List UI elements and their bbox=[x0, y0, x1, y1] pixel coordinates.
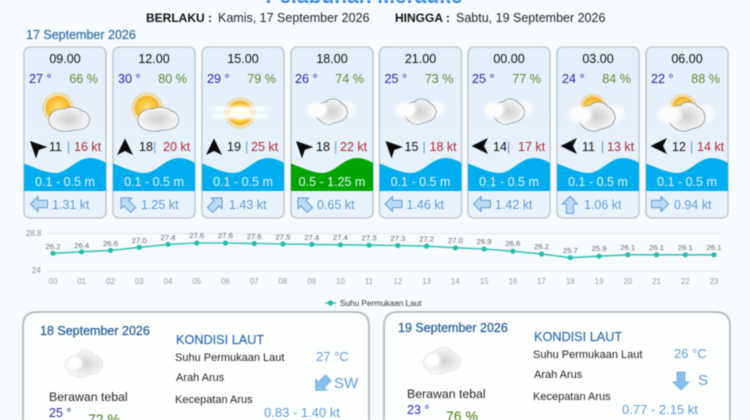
line chart: sea surface temperature: 27.4 bbox=[304, 233, 320, 242]
card: 09.00: 27 ° bbox=[29, 72, 52, 86]
card: 15.00: 79 % bbox=[247, 72, 276, 86]
card: 21.00: 15 bbox=[404, 140, 418, 154]
panel: 18 September forecast: Kecepatan Arus bbox=[175, 394, 253, 406]
card: 15.00 bbox=[202, 47, 284, 218]
card: 06.00: 12 bbox=[672, 140, 686, 154]
panel: 19 September forecast: Arah Arus bbox=[534, 369, 583, 381]
card: 18.00 bbox=[290, 47, 373, 218]
line chart: sea surface temperature: 02 bbox=[106, 277, 115, 286]
card: 12.00: 1.25 kt bbox=[141, 198, 179, 212]
line chart: sea surface temperature: 11 bbox=[365, 277, 373, 286]
line chart: sea surface temperature: 26.4 bbox=[74, 241, 90, 250]
validity header: HINGGA : bbox=[395, 11, 450, 25]
card: 15.00: 29 ° bbox=[207, 72, 230, 86]
card: 09.00: 1.31 kt bbox=[52, 198, 90, 212]
panel: 19 September forecast: KONDISI LAUT bbox=[534, 330, 622, 344]
line chart: sea surface temperature: 13 bbox=[422, 277, 431, 286]
card: 15.00: 19 bbox=[227, 140, 241, 154]
card: 12.00: | bbox=[153, 140, 156, 154]
card: 21.00: 25 ° bbox=[384, 72, 407, 86]
card: 21.00 bbox=[380, 47, 462, 218]
chart legend: Suhu Permukaan Laut bbox=[340, 299, 422, 308]
card: 09.00: 0.1 - 0.5 m bbox=[35, 175, 95, 189]
line chart: sea surface temperature: 25.7 bbox=[563, 246, 578, 255]
line chart: sea surface temperature: 08 bbox=[279, 277, 287, 286]
card: 00.00: 0.1 - 0.5 m bbox=[479, 175, 539, 189]
card: 15.00: 15.00 bbox=[227, 52, 259, 66]
card: 03.00: 03.00 bbox=[582, 52, 614, 66]
card: 06.00: 0.1 - 0.5 m bbox=[657, 175, 717, 189]
card: 12.00 bbox=[113, 47, 195, 218]
line chart: sea surface temperature: 12 bbox=[394, 277, 402, 286]
card: 03.00: 13 kt bbox=[607, 140, 635, 154]
card: 00.00 bbox=[468, 47, 550, 218]
validity header bbox=[146, 11, 605, 25]
line chart: sea surface temperature: 27.0 bbox=[132, 236, 147, 245]
panel: 19 September forecast: Suhu Permukaan Laut bbox=[533, 349, 642, 361]
line chart: sea surface temperature: 17 bbox=[537, 277, 546, 286]
card: 00.00: 1.42 kt bbox=[495, 198, 533, 212]
card: 06.00: | bbox=[690, 140, 693, 154]
card: 03.00: 84 % bbox=[602, 72, 631, 86]
card: 00.00: 14 bbox=[493, 140, 507, 154]
card: 03.00: 0.1 - 0.5 m bbox=[568, 175, 628, 189]
card: 09.00: 09.00 bbox=[49, 52, 81, 66]
line chart: sea surface temperature: 20 bbox=[623, 277, 633, 286]
card: 15.00: 25 kt bbox=[251, 140, 279, 154]
card: 21.00: | bbox=[422, 140, 426, 154]
card: 18.00: 74 % bbox=[335, 72, 364, 86]
line chart: sea surface temperature: 15 bbox=[480, 277, 489, 286]
card: 03.00 bbox=[557, 47, 639, 218]
card: 21.00: 73 % bbox=[425, 72, 454, 86]
line chart: sea surface temperature: 27.4 bbox=[333, 233, 349, 242]
card: 18.00: 0.65 kt bbox=[317, 198, 355, 212]
line chart: sea surface temperature: 27.6 bbox=[247, 232, 262, 241]
card: 00.00: 77 % bbox=[512, 72, 541, 86]
panel: 18 September forecast: KONDISI LAUT bbox=[176, 333, 264, 347]
card: 09.00 bbox=[24, 47, 106, 218]
card: 06.00: 06.00 bbox=[671, 52, 703, 66]
line chart: sea surface temperature: 22 bbox=[681, 277, 690, 286]
line chart: sea surface temperature: 10 bbox=[336, 277, 345, 286]
validity header: BERLAKU : bbox=[146, 11, 212, 25]
card: 18.00: 18 bbox=[316, 140, 330, 154]
card: 21.00: 21.00 bbox=[405, 52, 436, 66]
card: 09.00: 11 bbox=[49, 140, 62, 154]
card: 21.00: 1.46 kt bbox=[406, 198, 445, 212]
line chart: sea surface temperature: 26.1 bbox=[649, 243, 664, 252]
panel: 18 September forecast bbox=[23, 312, 369, 420]
card: 09.00: | bbox=[67, 140, 70, 154]
card: 03.00: 1.06 kt bbox=[584, 198, 622, 212]
card: 06.00 bbox=[646, 47, 728, 218]
line chart: sea surface temperature: 18 bbox=[566, 277, 575, 286]
line chart: sea surface temperature: 16 bbox=[508, 277, 517, 286]
line chart: sea surface temperature: 01 bbox=[77, 277, 86, 286]
panel: 18 September forecast: Suhu Permukaan Laut bbox=[175, 352, 284, 364]
line chart: sea surface temperature: 26.1 bbox=[707, 243, 721, 252]
card: 12.00: 0.1 - 0.5 m bbox=[124, 175, 184, 189]
validity header: Kamis, 17 September 2026 bbox=[218, 11, 370, 25]
line chart: sea surface temperature: 26.1 bbox=[620, 243, 635, 252]
card: 18.00: 18.00 bbox=[316, 52, 348, 66]
card: 03.00: 11 bbox=[582, 140, 595, 154]
line chart: sea surface temperature: 06 bbox=[221, 277, 230, 286]
card: 18.00: 22 kt bbox=[340, 140, 368, 154]
line chart: sea surface temperature: 26.2 bbox=[46, 242, 60, 251]
card: 18.00: | bbox=[334, 140, 337, 154]
panel: 18 September forecast: 18 September 2026 bbox=[40, 324, 150, 338]
line chart: sea surface temperature: 27.6 bbox=[189, 231, 204, 240]
line chart: sea surface temperature: 19 bbox=[595, 277, 603, 286]
panel: 19 September forecast: 26 °C bbox=[674, 346, 707, 361]
line chart: sea surface temperature: 28.8 bbox=[26, 229, 41, 238]
line chart: sea surface temperature: 05 bbox=[192, 277, 202, 286]
card: 18.00: 0.5 - 1.25 m bbox=[299, 175, 365, 189]
line chart: sea surface temperature: 23 bbox=[710, 277, 718, 286]
card: 09.00: 16 kt bbox=[74, 140, 102, 154]
line chart: sea surface temperature: 07 bbox=[250, 277, 259, 286]
line chart: sea surface temperature: 25.9 bbox=[592, 244, 607, 253]
card: 00.00: | bbox=[507, 140, 510, 154]
card: 06.00: 88 % bbox=[691, 72, 720, 86]
date heading: 17 September 2026 bbox=[26, 28, 136, 42]
panel: 19 September forecast: 23 ° bbox=[407, 403, 429, 417]
line chart: sea surface temperature: 21 bbox=[652, 277, 661, 286]
line chart: sea surface temperature: 27.2 bbox=[419, 234, 434, 244]
panel: 19 September forecast: S bbox=[698, 372, 708, 389]
validity header: Sabtu, 19 September 2026 bbox=[456, 11, 605, 25]
card: 00.00: 00.00 bbox=[493, 52, 525, 66]
panel: 19 September forecast: Berawan tebal bbox=[407, 387, 486, 401]
card: 12.00: 18 bbox=[139, 140, 153, 154]
card: 03.00: | bbox=[601, 140, 604, 154]
card: 15.00: 1.43 kt bbox=[229, 198, 267, 212]
card: 06.00: 14 kt bbox=[697, 140, 725, 154]
panel: 19 September forecast: 19 September 2026 bbox=[398, 321, 508, 335]
line chart: sea surface temperature: 27.3 bbox=[362, 234, 377, 242]
line chart: sea surface temperature: 27.0 bbox=[448, 236, 463, 245]
card: 18.00: 26 ° bbox=[295, 72, 318, 86]
line chart: sea surface temperature: 26.9 bbox=[477, 237, 492, 246]
line chart: sea surface temperature: 26.1 bbox=[678, 243, 693, 252]
line chart: sea surface temperature: 09 bbox=[307, 277, 316, 286]
line chart: sea surface temperature: 27.6 bbox=[218, 231, 233, 240]
line chart: sea surface temperature: 27.4 bbox=[161, 233, 176, 242]
panel: 19 September forecast: 0.77 - 2.15 kt bbox=[622, 402, 698, 417]
card: 03.00: 24 ° bbox=[562, 72, 585, 86]
panel: 19 September forecast bbox=[384, 312, 730, 420]
card: 12.00: 30 ° bbox=[118, 72, 141, 86]
card: 21.00: 0.1 - 0.5 m bbox=[391, 175, 450, 189]
panel: 18 September forecast: 0.83 - 1.40 kt bbox=[264, 405, 340, 420]
card: 00.00: 25 ° bbox=[472, 72, 495, 86]
card: 12.00: 12.00 bbox=[138, 52, 170, 66]
line chart: sea surface temperature: 27.5 bbox=[275, 232, 290, 242]
card: 00.00: 17 kt bbox=[518, 140, 546, 154]
card: 09.00: 66 % bbox=[69, 72, 98, 86]
line chart: sea surface temperature: 14 bbox=[451, 277, 460, 286]
line chart: sea surface temperature: 26.6 bbox=[103, 239, 118, 248]
line chart: sea surface temperature: 00 bbox=[49, 277, 58, 286]
card: 12.00: 20 kt bbox=[163, 140, 191, 154]
panel: 18 September forecast: 25 ° bbox=[49, 406, 71, 420]
card: 21.00: 18 kt bbox=[430, 140, 457, 154]
panel: 18 September forecast: 27 °C bbox=[316, 349, 349, 364]
card: 06.00: 0.94 kt bbox=[674, 198, 712, 212]
panel: 18 September forecast: SW bbox=[334, 375, 359, 392]
card: 15.00: | bbox=[245, 140, 248, 154]
card: 15.00: 0.1 - 0.5 m bbox=[213, 175, 273, 189]
line chart: sea surface temperature bbox=[26, 229, 721, 286]
card: 12.00: 80 % bbox=[158, 72, 187, 86]
line chart: sea surface temperature: 04 bbox=[164, 277, 173, 286]
panel: 19 September forecast: Kecepatan Arus bbox=[533, 391, 611, 403]
line chart: sea surface temperature: 03 bbox=[135, 277, 144, 286]
card: 06.00: 22 ° bbox=[651, 72, 674, 86]
line chart: sea surface temperature: 27.3 bbox=[390, 234, 405, 243]
panel: 18 September forecast: Berawan tebal bbox=[49, 390, 128, 404]
line chart: sea surface temperature: 26.2 bbox=[534, 242, 549, 251]
panel: 18 September forecast: Arah Arus bbox=[176, 372, 225, 384]
line chart: sea surface temperature: 24 bbox=[32, 266, 41, 275]
line chart: sea surface temperature: 26.6 bbox=[505, 239, 520, 248]
